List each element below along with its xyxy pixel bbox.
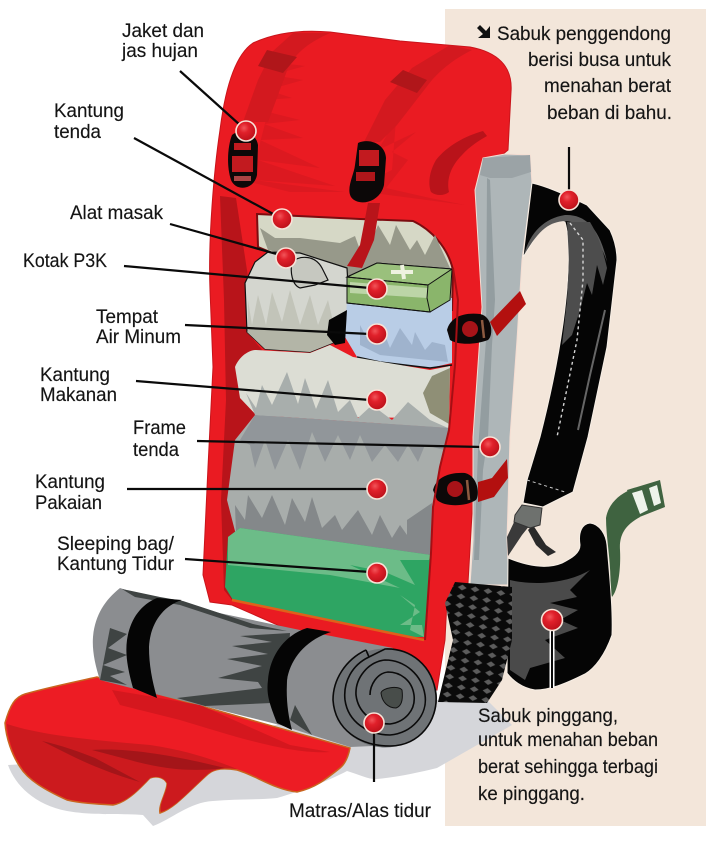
label: Sleeping bag / Kantung Tidur <box>57 533 175 575</box>
label: Jaket dan jas hujan: Jaket dan <box>122 20 204 42</box>
frame pole <box>470 154 532 585</box>
text: hip belt note: untuk menahan beban <box>478 729 658 751</box>
label: Tempat Air Minum <box>96 306 181 348</box>
label: Frame tenda <box>133 417 186 461</box>
strap adjuster <box>507 505 556 556</box>
rolled mat and flap <box>5 588 437 813</box>
icon: arrow <box>477 25 490 38</box>
label: Kantung tenda: tenda <box>54 121 101 143</box>
leader line: hip belt <box>550 630 554 688</box>
side pocket fold <box>429 131 487 195</box>
label: Jaket dan jas hujan <box>121 20 204 62</box>
label: Kantung Pakaian <box>35 471 105 514</box>
left strap <box>243 33 330 122</box>
cook pot bag <box>245 252 350 352</box>
backpack body <box>203 31 511 690</box>
text: shoulder strap note: berisi busa untuk <box>528 49 671 71</box>
marker pins <box>236 121 579 733</box>
middle buckle <box>349 141 386 202</box>
hip belt <box>507 523 612 690</box>
text: hip belt note: Sabuk pinggang, <box>478 705 618 727</box>
right strap <box>364 45 472 142</box>
leader lines <box>124 71 569 782</box>
label: Alat masak: Alat masak <box>70 202 163 224</box>
label: Matras/Alas tidur: Matras/Alas tidur <box>289 800 431 822</box>
text: shoulder strap note: Sabuk penggendong <box>497 23 671 45</box>
text: shoulder strap note: beban di bahu. <box>547 102 672 124</box>
clothes bag <box>227 415 450 560</box>
ground shadow <box>8 700 512 826</box>
shoulder strap <box>523 183 617 507</box>
top wrinkles <box>250 62 465 205</box>
food bag <box>235 345 450 430</box>
red right seam <box>425 268 458 640</box>
sleeping bag <box>225 528 431 640</box>
left dark band <box>220 196 262 600</box>
bedroll <box>93 588 395 747</box>
label: Kotak P3K: Kotak P3K <box>23 250 107 272</box>
first aid kit <box>347 263 452 312</box>
label: Kantung Pakaian: Pakaian <box>35 492 102 514</box>
top compartment: tent bag <box>257 203 453 310</box>
text: hip belt note <box>478 705 658 805</box>
label: Kantung Pakaian: Kantung <box>35 471 105 493</box>
upper side buckle <box>447 291 526 344</box>
label: Sleeping bag / Kantung Tidur: Sleeping bag/ <box>57 533 175 555</box>
background panel: beige <box>445 9 706 826</box>
label: Kantung Makanan: Makanan <box>40 384 117 406</box>
green strap with buckle <box>606 480 665 597</box>
label: Kantung Makanan: Kantung <box>40 364 110 386</box>
mesh pocket <box>438 582 512 703</box>
label: Kantung Makanan <box>40 364 117 406</box>
label: Kantung tenda: Kantung <box>54 100 124 122</box>
red flap <box>5 677 350 813</box>
left buckle <box>228 132 258 188</box>
water bottle <box>327 298 452 368</box>
text: shoulder strap note <box>497 23 672 124</box>
label: Tempat Air Minum: Tempat <box>96 306 159 328</box>
roll end spiral <box>333 648 437 748</box>
text: hip belt note: ke pinggang. <box>478 783 585 805</box>
label: Jaket dan jas hujan: jas hujan <box>121 40 198 62</box>
text: shoulder strap note: menahan berat <box>544 75 672 97</box>
label: Tempat Air Minum: Air Minum <box>96 326 181 348</box>
label: Frame tenda: tenda <box>133 439 179 461</box>
label: Sleeping bag / Kantung Tidur: Kantung Tidur <box>57 553 174 575</box>
label: Frame tenda: Frame <box>133 417 186 439</box>
label: Kantung tenda <box>54 100 124 143</box>
backpack illustration <box>203 31 665 703</box>
text: hip belt note: berat sehingga terbagi <box>478 756 658 778</box>
lower side buckle <box>433 459 508 505</box>
